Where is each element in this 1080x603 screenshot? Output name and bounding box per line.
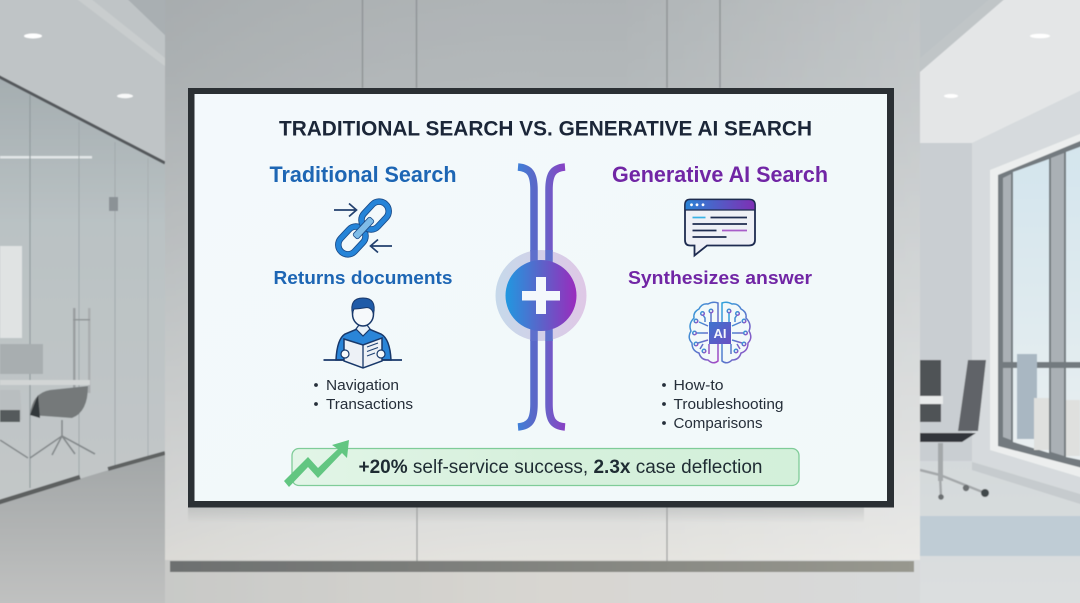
list: generative use cases: Troubleshooting — [674, 397, 784, 413]
display screen frame — [188, 88, 894, 508]
screen panel — [194, 94, 887, 501]
list: generative use cases: Comparisons — [674, 416, 762, 432]
icon: chain link with arrows — [334, 198, 393, 258]
right office room — [915, 0, 1080, 603]
callout text: +20% self-service success, 2.3x case deflection — [358, 457, 762, 478]
list: traditional use cases: Transactions — [326, 397, 413, 413]
panel: traditional search — [270, 162, 456, 413]
callout: results — [284, 440, 799, 487]
icon: growth arrow — [284, 440, 349, 487]
subheading: synthesizes answer: Synthesizes answer — [628, 267, 812, 288]
left office room — [0, 0, 170, 603]
icon: chat window — [685, 200, 755, 256]
icon: person reading — [324, 298, 402, 368]
icon: plus — [522, 277, 560, 314]
list: traditional use cases — [314, 378, 413, 413]
city skyline — [1017, 354, 1080, 456]
icon: AI brain — [689, 302, 751, 363]
panel: generative AI search — [612, 162, 828, 432]
office chairs — [920, 360, 989, 500]
list: generative use cases: How-to — [674, 378, 724, 394]
title: TRADITIONAL SEARCH VS. GENERATIVE AI SEARCH — [279, 118, 812, 140]
icon: AI chip: AI — [714, 326, 726, 341]
heading: traditional search: Traditional Search — [270, 162, 456, 187]
subheading: returns documents: Returns documents — [274, 267, 452, 288]
list: traditional use cases: Navigation — [326, 378, 399, 394]
list: generative use cases — [662, 378, 784, 432]
wall and baseboard — [165, 0, 920, 572]
meeting table and chairs — [0, 344, 95, 458]
floor below wall — [165, 560, 920, 603]
icon: AI chip — [709, 322, 731, 344]
center connector with plus — [496, 167, 586, 427]
heading: generative AI search: Generative AI Search — [612, 162, 828, 187]
